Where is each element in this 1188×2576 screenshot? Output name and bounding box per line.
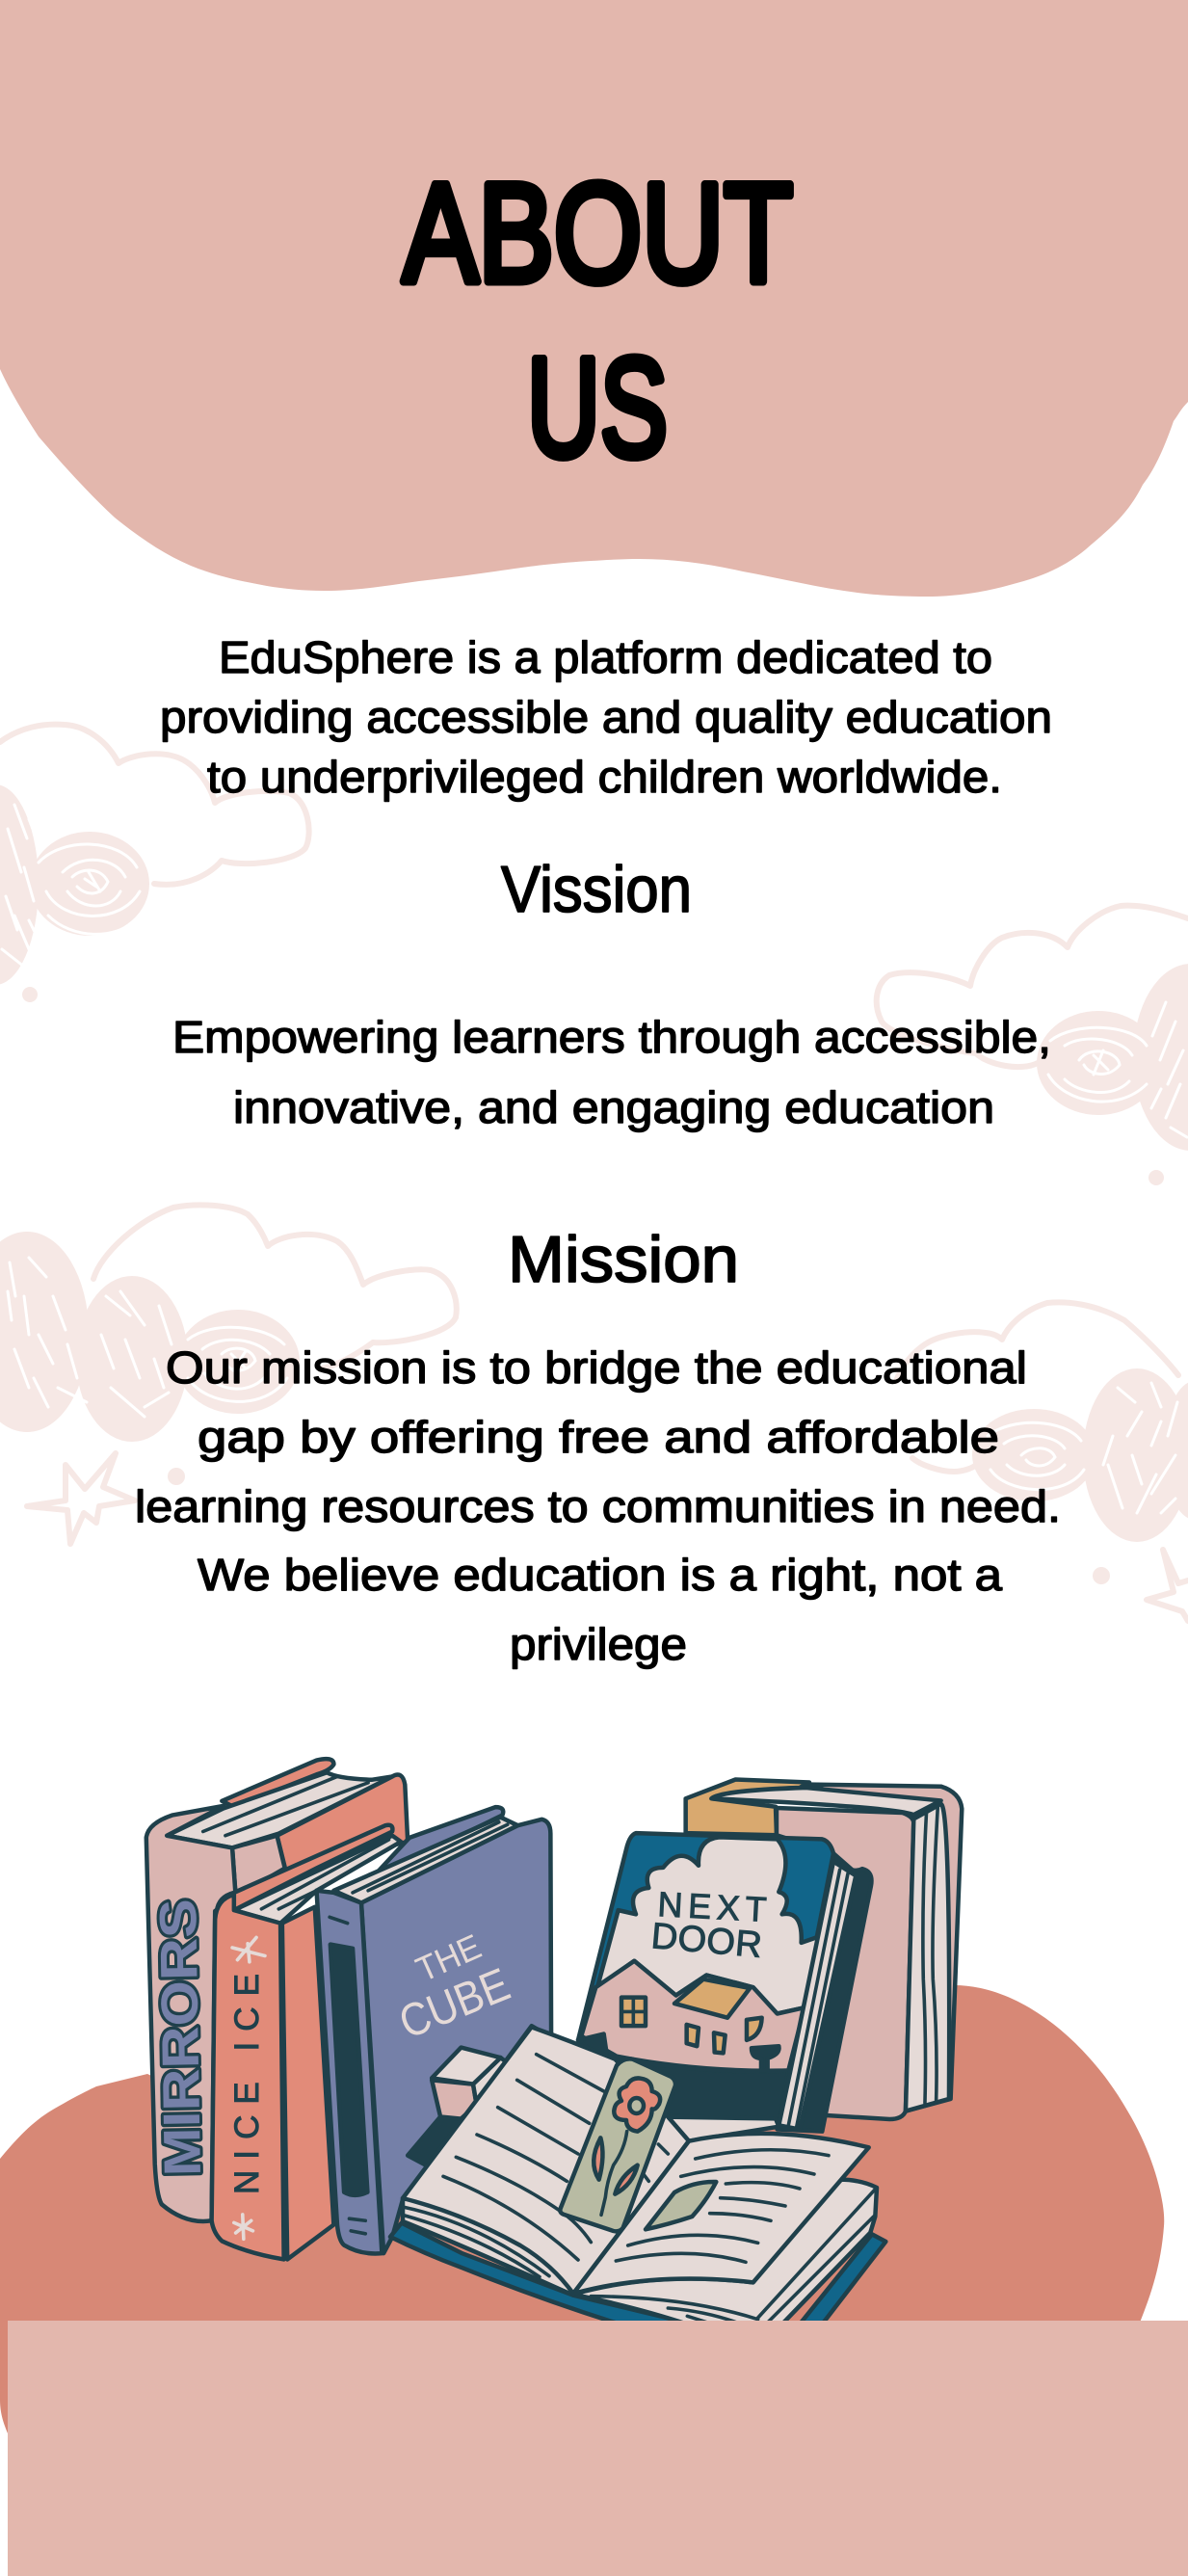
mission text: privilege [510,1619,687,1669]
open book: right page stack [573,2180,877,2324]
illustration: stack of books [146,1759,962,2324]
next door cover title: DOOR [649,1916,763,1966]
book: the cube [317,1807,551,2253]
intro text [160,632,1052,802]
cloud: lower left [0,1205,457,1442]
star [1147,1550,1188,1621]
title: US [527,329,668,486]
star [27,1453,135,1544]
book: mirrors [146,1759,408,2221]
title [403,154,793,486]
book: nice ice [212,1825,401,2259]
intro text: to underprivileged children worldwide. [207,752,1002,802]
intro text: providing accessible and quality education [160,692,1052,742]
background clouds [0,725,1188,1621]
cube cover title: CUBE [392,1959,517,2049]
open book: teal cover corner [800,2234,885,2324]
dot [22,987,38,1002]
intro text: EduSphere is a platform dedicated to [219,632,992,682]
mission text: gap by offering free and affordable [198,1412,999,1462]
bottom band [8,2321,1188,2576]
mission text: Our mission is to bridge the educational [166,1342,1027,1393]
nice ice spine title: NICE ICE [228,1974,266,2194]
mission text: We believe education is a right, not a [198,1550,1002,1600]
open book: left page stack [403,2198,591,2296]
salmon blob behind books [0,1985,1164,2467]
open book: leaf [646,2182,716,2229]
vision text [172,1012,1051,1132]
cloud: upper left [0,725,309,985]
next door cover title: NEXT [657,1884,768,1929]
cloud: upper right [877,906,1188,1151]
header blob [0,0,1188,597]
dot [1093,1567,1110,1584]
open book: left page [403,2027,689,2294]
open book: right page [573,2134,869,2294]
open book: pages behind [668,2117,779,2141]
vision text: Empowering learners through accessible, [172,1012,1051,1062]
cube cover title: THE [410,1926,487,1989]
book: pink back book [686,1780,962,2132]
vision text: innovative, and engaging education [233,1082,994,1132]
bookmark [560,2058,675,2231]
book: next door [578,1833,856,2130]
dot [1148,1170,1164,1185]
open book: teal cover [390,2223,694,2324]
cloud: lower right [896,1302,1188,1542]
title: ABOUT [403,154,793,311]
dot [168,1468,185,1485]
open book [390,2027,885,2324]
mission text: learning resources to communities in need. [135,1481,1061,1531]
heading: vision: Vission [501,853,692,926]
heading: mission: Mission [508,1223,739,1296]
mission text [135,1342,1061,1669]
next door cover title [649,1884,768,1966]
mirrors spine title: MIRRORS [149,1899,212,2177]
